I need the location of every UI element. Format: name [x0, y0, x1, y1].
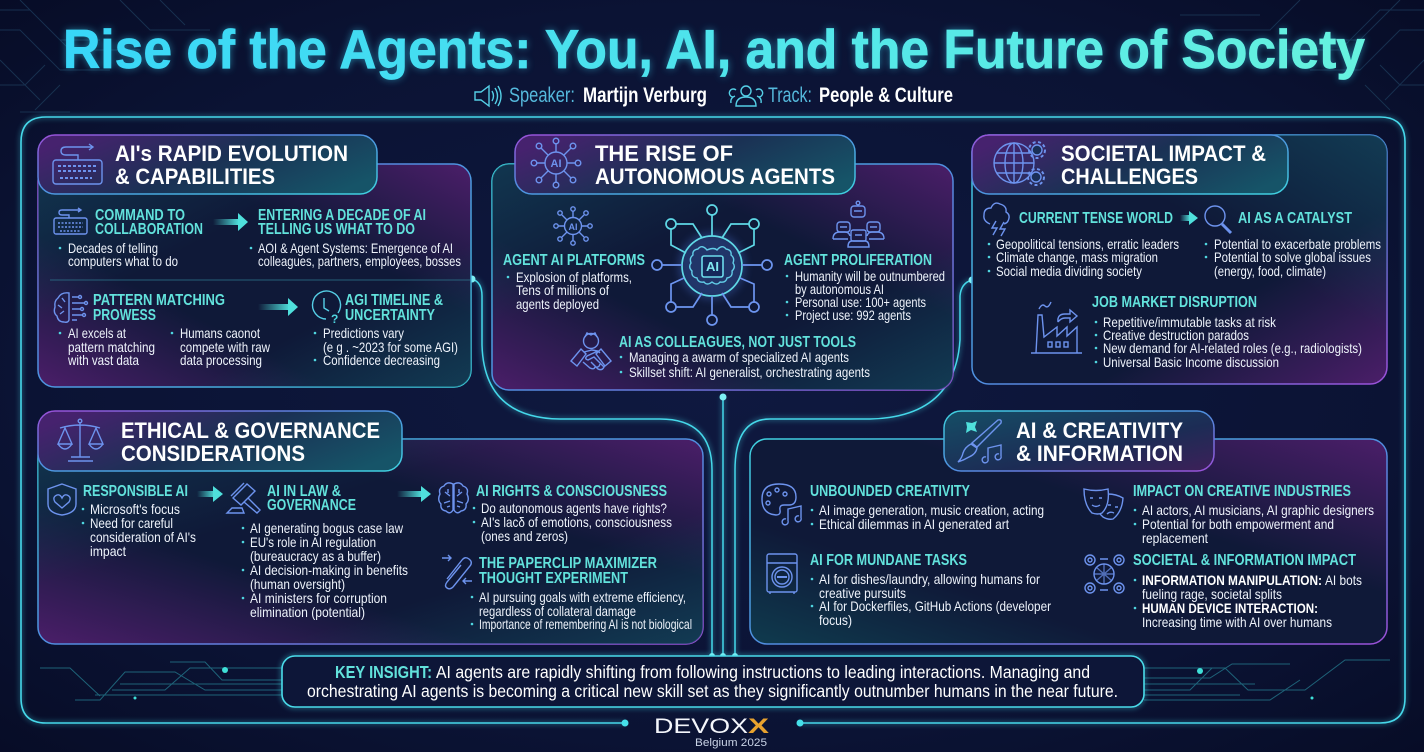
icon: robots	[833, 201, 884, 247]
block: societal and information impact: INFORMATION MANIPULATION:	[1142, 572, 1322, 588]
block: pattern matching prowess: data processing	[180, 352, 262, 368]
block: pattern matching prowess: AI excels at	[68, 325, 126, 341]
block: job market disruption: New demand for AI-related roles (e.g., radiologists)	[1103, 340, 1362, 356]
block: AI as colleagues: Skillset shift: AI generalist, orchestrating agents	[629, 364, 870, 380]
block: pattern matching prowess: PROWESS	[93, 307, 156, 324]
block: AI rights: (ones and zeros)	[481, 528, 568, 544]
block: command to collaboration: computers what to do	[68, 253, 178, 269]
block: agent proliferation: by autonomous AI	[795, 281, 884, 297]
block: AI as colleagues: AI AS COLLEAGUES, NOT JUST TOOLS	[619, 334, 856, 351]
icon: paperclip	[442, 555, 472, 589]
block: AI for mundane tasks: creative pursuits	[819, 585, 906, 601]
icon: washing machine	[767, 554, 797, 594]
block: AI as colleagues: Managing a awarm of specialized AI agents	[629, 349, 849, 365]
heading: autonomous agents	[515, 135, 855, 194]
logo: Devoxx Belgium 2025: Belgium 2025	[695, 737, 767, 749]
block: responsible AI	[82, 483, 196, 559]
subtitle: speaker and track	[475, 84, 953, 107]
block: pattern matching prowess: PATTERN MATCHING	[93, 292, 225, 309]
block: paperclip maximizer: Importance of remembering AI is not biological	[479, 616, 692, 632]
arrow	[258, 298, 298, 316]
divider	[50, 279, 470, 281]
block: paperclip maximizer: THE PAPERCLIP MAXIMIZER	[479, 555, 657, 572]
block: AGI timeline: AGI TIMELINE &	[345, 292, 443, 309]
block: agent AI platforms: Tens of millions of	[516, 282, 609, 298]
outer frame	[21, 117, 1405, 726]
heading: ethical and governance	[38, 411, 402, 471]
icon: magnifier	[1205, 206, 1231, 233]
block: responsible AI: RESPONSIBLE AI	[83, 483, 188, 500]
block: agent proliferation: AGENT PROLIFERATION	[784, 252, 932, 269]
block: current tense world: Climate change, mass migration	[996, 249, 1158, 265]
block: entering a decade: AOI & Agent Systems: Emergence of AI	[258, 240, 453, 256]
block: AGI timeline: (e g . ~2023 for some AGI)	[323, 339, 458, 355]
block: agent proliferation: Personal use: 100+ agents	[795, 294, 926, 310]
block: AI as a catalyst: (energy, food, climate)	[1214, 263, 1326, 279]
block: AI in law and governance: AI decision-making in benefits	[250, 562, 408, 578]
icon: speaker	[475, 86, 501, 106]
block: job market disruption: JOB MARKET DISRUPTION	[1092, 294, 1257, 311]
arrow	[197, 486, 223, 502]
block: AGI timeline: Confidence decreasing	[323, 352, 440, 368]
arrow	[1180, 211, 1198, 225]
subtitle: speaker and track: Track:	[768, 84, 812, 107]
block: job market disruption: Creative destruction parados	[1103, 327, 1249, 343]
heading: autonomous agents: THE RISE OF	[595, 141, 733, 166]
heading: AI and creativity	[944, 411, 1214, 471]
icon: brain	[439, 483, 468, 513]
block: societal and information impact: HUMAN DEVICE INTERACTION:	[1142, 600, 1318, 616]
heading: societal impact: SOCIETAL IMPACT &	[1061, 141, 1266, 166]
block: AI rights: AI RIGHTS & CONSCIOUSNESS	[476, 483, 667, 500]
block: agent proliferation: Humanity will be outnumbered	[795, 268, 945, 284]
block: impact on creative industries: AI actors, AI musicians, AI graphic designers	[1142, 502, 1374, 518]
icon: storm cloud	[984, 203, 1009, 236]
block: AI as a catalyst: Potential to exacerbate problems	[1214, 236, 1381, 252]
panel: AI and creativity	[750, 411, 1387, 644]
icon: heart shield	[48, 484, 76, 515]
connector lines	[468, 276, 976, 659]
icon: keyboard large	[53, 144, 102, 184]
block: responsible AI: impact	[90, 543, 126, 559]
block: impact on creative industries: replacement	[1142, 530, 1208, 546]
icon: scales	[58, 419, 103, 461]
block: current tense world: Geopolitical tensions, erratic leaders	[996, 236, 1179, 252]
icon: palette and notes	[762, 484, 801, 525]
block: AI as a catalyst: Potential to solve global issues	[1214, 249, 1371, 265]
block: AI in law and governance: AI IN LAW &	[267, 483, 341, 500]
block: paperclip maximizer: THOUGHT EXPERIMENT	[479, 570, 628, 587]
block: impact on creative industries: Potential for both empowerment and	[1142, 516, 1334, 532]
arrow	[397, 486, 431, 502]
heading: AI and creativity: AI & CREATIVITY	[1016, 418, 1183, 443]
block: pattern matching prowess	[59, 292, 271, 368]
block: unbounded creativity: Ethical dilemmas in AI generated art	[819, 516, 1009, 532]
block: pattern matching prowess: Humans caonot	[180, 325, 260, 341]
block: entering a decade: ENTERING A DECADE OF AI	[258, 207, 426, 224]
logo: Devoxx Belgium 2025: DEVOX	[654, 715, 748, 738]
block: AI in law and governance: (human oversight)	[250, 576, 345, 592]
block: societal and information impact: Increasing time with AI over humans	[1142, 614, 1332, 630]
block: entering a decade: TELLING US WHAT TO DO	[258, 221, 415, 238]
heading: ethical and governance: ETHICAL & GOVERNANCE	[121, 418, 380, 443]
title: Rise of the Agents: You, AI, and the Future of Society	[63, 18, 1365, 80]
icon: handshake with crown	[571, 333, 611, 370]
block: unbounded creativity: UNBOUNDED CREATIVITY	[810, 483, 971, 500]
block: impact on creative industries	[1133, 483, 1374, 546]
panel: AI's rapid evolution	[38, 135, 471, 387]
block: command to collaboration	[59, 207, 203, 269]
block: agent AI platforms: agents deployed	[516, 296, 599, 312]
block: current tense world: Social media dividing society	[996, 263, 1142, 279]
heading: societal impact	[972, 135, 1288, 194]
icon: AI hub header	[531, 138, 581, 188]
icon: paintbrush and note	[958, 420, 1001, 463]
icon: clock question	[313, 291, 341, 326]
callout: key insight	[282, 656, 1144, 707]
block: impact on creative industries: IMPACT ON CREATIVE INDUSTRIES	[1133, 483, 1351, 500]
block: AI rights: AI's lacδ of emotions, consciousness	[481, 514, 672, 530]
block: pattern matching prowess: pattern matching	[68, 339, 155, 355]
icon: theatre masks	[1084, 489, 1123, 519]
block: AI rights: Do autonomous agents have rights?	[481, 500, 667, 516]
block: entering a decade: colleagues, partners, employees, bosses	[258, 253, 461, 269]
block: paperclip maximizer: regardless of collateral damage	[479, 603, 636, 619]
heading: AI's rapid evolution: & CAPABILITIES	[115, 164, 275, 189]
block: AGI timeline	[314, 292, 458, 368]
icon: factory	[1031, 302, 1082, 353]
icon: AI hub header: AI	[550, 158, 562, 170]
heading: autonomous agents: AUTONOMOUS AGENTS	[595, 164, 835, 189]
block: pattern matching prowess: with vast data	[67, 352, 139, 368]
block: agent AI platforms: Explosion of platforms,	[516, 269, 632, 285]
panel: ethical and governance	[38, 411, 703, 644]
block: entering a decade	[250, 207, 461, 269]
block: responsible AI: Need for careful	[90, 515, 173, 531]
block: AI in law and governance: GOVERNANCE	[267, 497, 356, 514]
block: societal and information impact: SOCIETAL & INFORMATION IMPACT	[1133, 552, 1356, 569]
block: AI as colleagues	[619, 334, 870, 380]
heading: ethical and governance: CONSIDERATIONS	[121, 441, 305, 466]
heading: AI's rapid evolution	[38, 135, 377, 194]
block: AI as a catalyst: AI AS A CATALYST	[1238, 210, 1352, 227]
block: AI in law and governance: AI ministers for corruption	[250, 590, 387, 606]
block: current tense world	[988, 210, 1179, 279]
block: job market disruption: Repetitive/immutable tasks at risk	[1103, 314, 1277, 330]
icon: AI hub small: AI	[568, 222, 578, 232]
icon: AI hub small	[554, 207, 592, 245]
icon: brain with swirl nodes	[1085, 555, 1124, 593]
block: AI for mundane tasks: AI for dishes/laundry, allowing humans for	[819, 571, 1040, 587]
block: AI rights	[473, 483, 672, 544]
icon: people	[729, 86, 763, 106]
block: AI in law and governance: elimination (potential)	[250, 604, 365, 620]
block: AGI timeline: UNCERTAINTY	[345, 307, 436, 324]
callout: key insight: orchestrating AI agents is becoming a critical new skill set as they significantly outnumber humans in the near future.	[307, 681, 1118, 701]
block: responsible AI: Microsoft's focus	[90, 501, 180, 517]
block: AI for mundane tasks	[810, 552, 1051, 628]
icon: central AI brain network	[652, 205, 772, 325]
block: paperclip maximizer	[471, 555, 692, 632]
block: command to collaboration: Decades of telling	[68, 240, 158, 256]
block: command to collaboration: COLLABORATION	[95, 221, 203, 238]
icon: keyboard small	[54, 208, 87, 234]
icon: gavel	[227, 483, 260, 513]
icon: globe and gears	[994, 142, 1045, 185]
block: agent AI platforms: AGENT AI PLATFORMS	[503, 252, 645, 269]
block: societal and information impact: AI bots	[1325, 572, 1362, 588]
logo: Devoxx Belgium 2025	[654, 715, 769, 749]
block: AI as a catalyst	[1205, 210, 1381, 279]
subtitle: speaker and track: Speaker:	[509, 84, 575, 107]
block: AI in law and governance	[242, 483, 408, 620]
block: societal and information impact	[1133, 552, 1362, 630]
block: command to collaboration: COMMAND TO	[95, 207, 185, 224]
heading: AI and creativity: & INFORMATION	[1016, 441, 1183, 466]
block: paperclip maximizer: AI pursuing goals with extreme efficiency,	[479, 589, 686, 605]
callout: key insight: KEY INSIGHT:	[335, 662, 432, 682]
subtitle: speaker and track: People & Culture	[819, 84, 953, 107]
logo: Devoxx Belgium 2025: X	[748, 715, 769, 738]
arrow	[213, 213, 248, 231]
block: AI for mundane tasks: AI for Dockerfiles, GitHub Actions (developer	[819, 598, 1051, 614]
panel: the rise of autonomous agents	[492, 135, 953, 390]
title: Rise of the Agents: You, AI, and the Future of Society	[63, 18, 1365, 80]
block: unbounded creativity	[810, 483, 1044, 532]
heading: societal impact: CHALLENGES	[1061, 164, 1198, 189]
block: unbounded creativity: AI image generation, music creation, acting	[819, 502, 1044, 518]
callout: key insight: AI agents are rapidly shifting from following instructions to leading interactions. Managing and	[436, 662, 1090, 682]
icon: central AI brain network: AI	[706, 259, 719, 274]
block: AI in law and governance: EU's role in AI regulation	[250, 534, 376, 550]
icon: brain data	[54, 293, 88, 322]
panel: societal impact	[972, 135, 1387, 384]
block: AI for mundane tasks: AI FOR MUNDANE TASKS	[810, 552, 967, 569]
block: pattern matching prowess: compete with raw	[180, 339, 271, 355]
block: AGI timeline: Predictions vary	[323, 325, 404, 341]
block: agent AI platforms	[503, 252, 645, 312]
block: societal and information impact: fueling rage, societal splits	[1142, 586, 1282, 602]
block: job market disruption: Universal Basic Income discussion	[1103, 354, 1279, 370]
block: AI in law and governance: (bureaucracy as a buffer)	[250, 548, 381, 564]
block: job market disruption	[1092, 294, 1362, 370]
block: agent proliferation	[784, 252, 945, 323]
block: AI for mundane tasks: focus)	[819, 612, 852, 628]
block: AI in law and governance: AI generating bogus case law	[250, 520, 404, 536]
heading: AI's rapid evolution: AI's RAPID EVOLUTION	[115, 141, 348, 166]
subtitle: speaker and track: Martijn Verburg	[583, 84, 707, 107]
block: current tense world: CURRENT TENSE WORLD	[1019, 210, 1173, 227]
block: agent proliferation: Project use: 992 agents	[795, 307, 911, 323]
block: responsible AI: consideration of AI's	[90, 529, 196, 545]
icon: clock question: ?	[331, 312, 338, 326]
